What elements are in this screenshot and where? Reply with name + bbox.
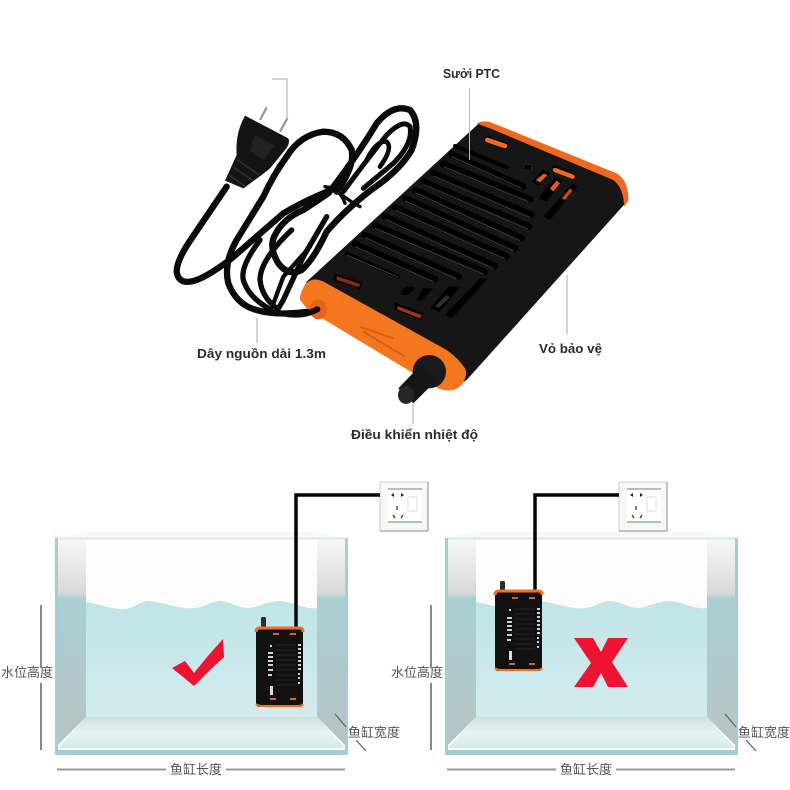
height dimension [430, 605, 432, 750]
red check mark [172, 639, 224, 686]
cable grommet [310, 299, 327, 319]
panel: correct installation tank [1, 482, 428, 777]
plug [225, 107, 289, 188]
orange windows [333, 139, 577, 320]
side panes [58, 532, 86, 745]
length label: 鱼缸长度 [560, 762, 612, 777]
width dimension [725, 714, 756, 751]
label: Sưởi PTC: Sưởi PTC [443, 66, 501, 81]
side panes [448, 532, 476, 745]
socket [619, 482, 667, 531]
height label: 水位高度 [391, 665, 443, 680]
tank frame [55, 538, 348, 755]
small heater [495, 581, 542, 671]
socket [380, 482, 428, 531]
heater black body [300, 121, 628, 388]
height label: 水位高度 [1, 665, 53, 680]
length dimension [447, 768, 735, 770]
tank back and glass [476, 532, 707, 717]
temperature knob [398, 355, 446, 404]
heater cable [296, 495, 380, 628]
label: temperature control: Điều khiển nhiệt độ [351, 427, 478, 442]
label: protective shell: Vỏ bảo vệ [539, 341, 602, 356]
width label: 鱼缸宽度 [738, 725, 790, 740]
small heater [256, 617, 303, 707]
heater orange rim on top edge [477, 121, 628, 207]
panel: incorrect installation tank [391, 482, 790, 777]
width dimension [335, 714, 366, 751]
tank floor [58, 717, 345, 748]
tank floor [448, 717, 735, 748]
heater cable [535, 495, 619, 591]
heater orange end cap [300, 279, 466, 391]
water [86, 601, 317, 717]
red X mark [574, 638, 628, 687]
power cord [177, 108, 416, 314]
tank frame [445, 538, 738, 755]
label: power cord: Dây nguồn dài 1.3m [197, 346, 326, 361]
ventilation slots [347, 146, 532, 279]
leader lines [257, 79, 567, 424]
length label: 鱼缸长度 [170, 762, 222, 777]
width label: 鱼缸宽度 [348, 725, 400, 740]
height dimension [40, 605, 42, 750]
water [476, 601, 707, 717]
tank back and glass [86, 532, 317, 717]
product photo: heater with cord [177, 107, 628, 404]
length dimension [57, 768, 345, 770]
slot highlights [347, 157, 530, 282]
